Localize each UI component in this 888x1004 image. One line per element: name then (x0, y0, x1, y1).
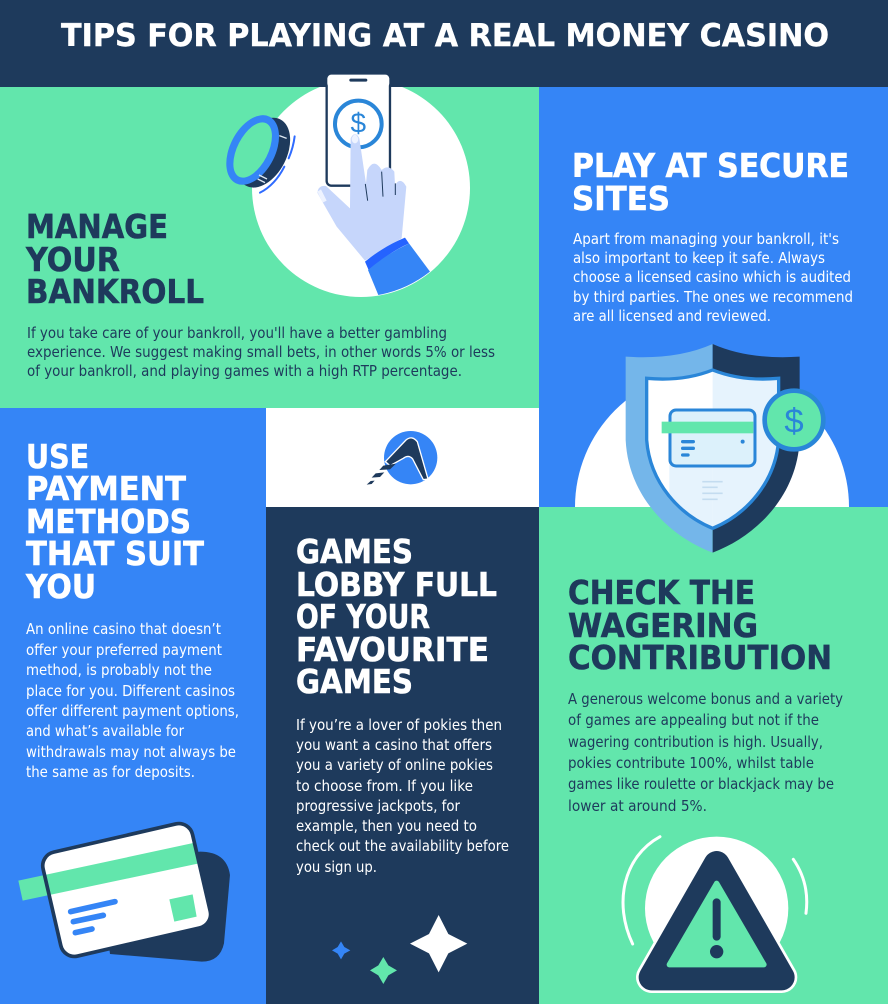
text: secure sites body: choose a licensed casino which is audited (573, 268, 851, 286)
text: payment methods body: and what’s available for (26, 722, 185, 740)
heading: play at secure sites: PLAY AT SECURE (572, 146, 849, 185)
text: wagering body: games like roulette or blackjack may be (568, 775, 834, 793)
text: payment methods body: the same as for deposits. (26, 763, 195, 781)
text: payment methods body (26, 620, 239, 781)
heading: check the wagering contribution: CHECK THE (568, 573, 755, 612)
icon: shield coin (765, 391, 823, 449)
icon: hand (317, 134, 430, 295)
heading: games lobby: LOBBY FULL (296, 565, 497, 604)
text: games lobby body: example, then you need to (296, 817, 477, 835)
text: wagering body: of games are appealing but not if the (568, 711, 819, 729)
heading: games lobby: GAMES (296, 662, 413, 701)
heading: manage your bankroll: YOUR (25, 240, 120, 279)
text: games lobby body: progressive jackpots, for (296, 797, 461, 815)
text: secure sites body: by third parties. The ones we recommend (573, 288, 853, 306)
icon: logo (367, 431, 437, 485)
icon: warning triangle (623, 837, 807, 980)
panel: games lobby (266, 507, 539, 1004)
heading: check the wagering contribution: WAGERING (568, 606, 758, 645)
heading: use payment methods: PAYMENT (26, 469, 186, 508)
text: payment methods body: method, is probably not the (26, 661, 212, 679)
text: wagering body (568, 690, 843, 815)
heading: use payment methods (25, 437, 204, 606)
text: wagering body: A generous welcome bonus and a variety (568, 690, 843, 708)
text: wagering body: pokies contribute 100%, whilst table (568, 754, 814, 772)
heading: manage your bankroll: MANAGE (26, 207, 168, 246)
text: games lobby body: you a variety of online pokies (296, 756, 493, 774)
text: manage your bankroll body: of your bankroll, and playing games with a high RTP percentage. (27, 362, 462, 380)
panel: manage your bankroll (0, 79, 539, 408)
text: manage your bankroll body (27, 324, 495, 380)
heading: check the wagering contribution (568, 573, 832, 677)
illustration: coin, phone and hand (216, 75, 430, 295)
text: wagering body: wagering contribution is high. Usually, (568, 733, 823, 751)
text: games lobby body: you sign up. (296, 858, 377, 876)
icon: shield with card and coin (626, 344, 823, 553)
panel: check the wagering contribution (539, 507, 888, 1004)
text: wagering body: lower at around 5%. (568, 797, 707, 815)
header band (0, 0, 888, 87)
heading: use payment methods: USE (26, 437, 89, 476)
text: payment methods body: An online casino that doesn’t (26, 620, 221, 638)
panel: use payment methods (0, 408, 266, 1004)
text: games lobby body: If you’re a lover of pokies then (296, 716, 502, 734)
text: payment methods body: offer your preferred payment (26, 641, 222, 659)
heading: use payment methods: THAT SUIT (26, 534, 204, 573)
heading: manage your bankroll (25, 207, 204, 311)
heading: use payment methods: METHODS (26, 502, 191, 541)
text: manage your bankroll body: If you take care of your bankroll, you'll have a better gambling (27, 324, 447, 342)
heading: check the wagering contribution: CONTRIBUTION (568, 638, 832, 677)
text: payment methods body: place for you. Different casinos (26, 682, 235, 700)
heading: games lobby: GAMES (296, 532, 413, 571)
heading: games lobby: OF YOUR (296, 597, 430, 636)
text: games lobby body (296, 716, 509, 876)
text: games lobby body: you want a casino that offers (296, 736, 492, 754)
title: TIPS FOR PLAYING AT A REAL MONEY CASINO (61, 18, 829, 54)
text: payment methods body: withdrawals may not always be (26, 743, 236, 761)
text: secure sites body (573, 230, 853, 325)
text: secure sites body: Apart from managing your bankroll, it's (573, 230, 839, 248)
panel: play at secure sites (539, 87, 888, 507)
heading: play at secure sites (572, 146, 849, 218)
text: secure sites body: also important to keep it safe. Always (573, 249, 825, 267)
heading: use payment methods: YOU (25, 567, 96, 606)
text: games lobby body: check out the availability before (296, 837, 509, 855)
heading: games lobby (296, 532, 497, 701)
heading: games lobby: FAVOURITE (296, 630, 489, 669)
text: games lobby body: to choose from. If you like (296, 777, 473, 795)
heading: play at secure sites: SITES (572, 179, 670, 218)
text: manage your bankroll body: experience. We suggest making small bets, in other words 5% or less (27, 343, 495, 361)
text: payment methods body: offer different payment options, (26, 702, 239, 720)
icon: sparkles (332, 915, 467, 984)
panel: logo (266, 408, 539, 507)
heading: manage your bankroll: BANKROLL (26, 272, 204, 311)
icon: dollar sign: $ (351, 108, 367, 139)
icon: phone (327, 75, 390, 186)
icon: payment cards (18, 821, 230, 962)
text: secure sites body: are all licensed and reviewed. (573, 307, 771, 325)
icon: shield coin: $ (784, 402, 804, 440)
icon: coin (216, 106, 301, 197)
